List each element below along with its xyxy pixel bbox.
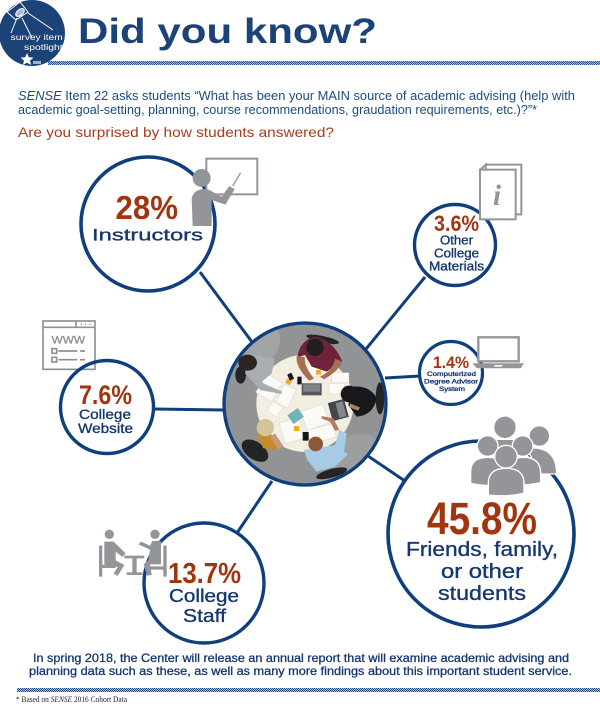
closing note (29, 651, 572, 678)
icon: group of people (471, 416, 557, 496)
panel: instructors (81, 157, 257, 291)
closing note: planning data such as these, as well as many more findings about this important student service. (29, 664, 572, 678)
label: friends, family, or other students: or other (441, 561, 523, 583)
question: Are you surprised by how students answered? (18, 124, 334, 140)
label: college website: Website (78, 420, 133, 436)
footnote: * Based on SENSE 2016 Cohort Data (16, 694, 127, 704)
badge wording: survey item (11, 32, 63, 42)
icon: spotlight telescope (7, 2, 53, 38)
intro text (18, 89, 575, 117)
stat: 13.7%: 13.7% (168, 558, 241, 590)
header rule (48, 61, 600, 65)
stat: 45.8%: 45.8% (427, 493, 537, 544)
center photo: students around a table (220, 317, 393, 490)
phones (287, 373, 309, 441)
papers (256, 359, 349, 444)
stat: 3.6%: 3.6% (434, 211, 479, 236)
label: other college materials (429, 234, 484, 274)
panel: friends, family, or other students (388, 416, 574, 627)
student lower-left: blonde hair (257, 419, 283, 449)
icon: information documents: i (493, 180, 502, 212)
label: computerized degree advisor system: Degree Advisor (424, 378, 479, 386)
connector lines (154, 272, 425, 533)
laptops (302, 383, 349, 421)
title: Did you know? (78, 12, 377, 51)
sticky notes (285, 370, 321, 431)
badge wording (11, 32, 63, 52)
student top: maroon shirt (296, 337, 342, 381)
panel: computerized degree advisor (420, 337, 524, 404)
survey item spotlight badge (0, 0, 65, 66)
panel: other college materials (414, 165, 521, 286)
student left: grey shirt (238, 355, 282, 394)
teal notebook (287, 408, 304, 424)
label: college staff (169, 586, 239, 626)
label: other college materials: College (434, 246, 479, 260)
label: instructors: Instructors (92, 226, 203, 244)
label: computerized degree advisor system: Computerized (427, 371, 476, 378)
icon: laptop (473, 337, 524, 368)
intro text: SENSE Item 22 asks students “What has been your MAIN source of academic advising (help with (18, 89, 575, 103)
icon: instructor at board (192, 159, 257, 226)
label: college staff: Staff (183, 606, 227, 626)
table (256, 355, 354, 452)
label: other college materials: Other (440, 234, 473, 248)
stat: 28%: 28% (116, 189, 178, 226)
footer rule (17, 688, 600, 692)
closing note: In spring 2018, the Center will release an annual report that will examine academic advising and (33, 651, 569, 665)
chairs (235, 333, 384, 482)
label: computerized degree advisor system (424, 371, 479, 393)
label: college website (78, 406, 133, 436)
badge wording: spotlight (24, 42, 63, 52)
label: friends, family, or other students: students (438, 583, 526, 605)
label: friends, family, or other students (406, 539, 558, 605)
label: college staff: College (169, 586, 239, 606)
icon: two people at a desk (101, 530, 165, 577)
label: friends, family, or other students: Friends, family, (406, 539, 558, 561)
stat: 7.6%: 7.6% (79, 380, 132, 410)
panel: college staff (101, 523, 264, 643)
panel: college website (43, 321, 153, 454)
icon: star (20, 53, 34, 65)
intro text: academic goal-setting, planning, course recommendations, graudation requirements, etc.)?”* (18, 103, 537, 117)
label: college website: College (79, 406, 131, 422)
label: other college materials: Materials (429, 260, 484, 274)
icon: web page: WWW (52, 335, 85, 347)
stat: 1.4%: 1.4% (433, 353, 469, 372)
label: computerized degree advisor system: System (439, 386, 465, 393)
student right: black top (341, 386, 377, 417)
student bottom: blue shirt (304, 416, 348, 472)
